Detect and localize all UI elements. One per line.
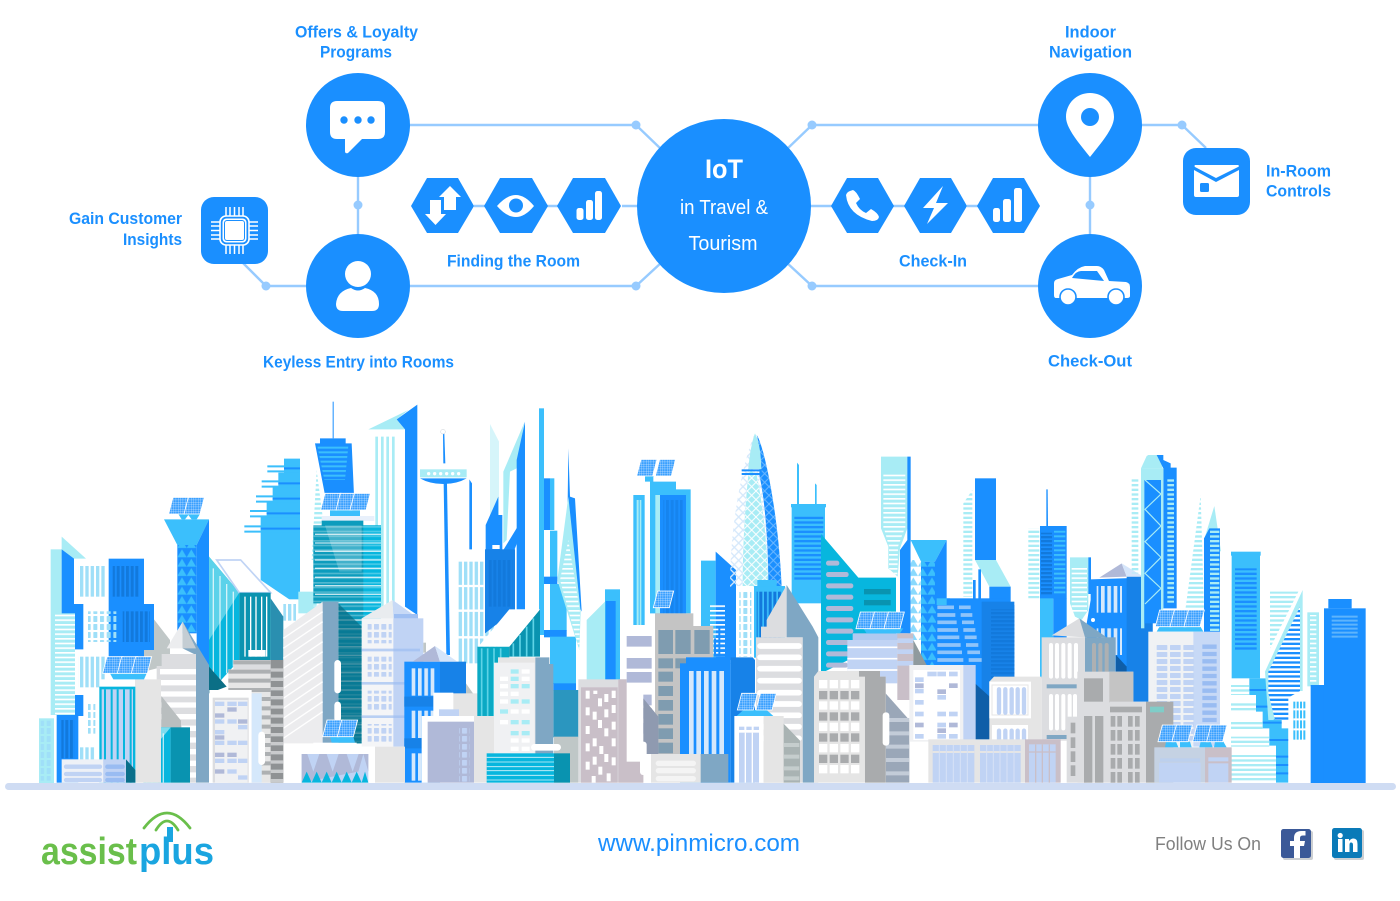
low front block [62,759,126,783]
twin spire tower [791,463,826,603]
stepped cyan lines block [1231,678,1288,783]
logo word plus: plus [139,831,214,873]
facebook icon [1281,829,1313,860]
cyan wedge tower [701,552,736,660]
label: indoor navigation: Indoor [1065,22,1116,42]
teal stepped building with pills [821,534,896,673]
node: check-out car icon [1038,234,1142,338]
gray roofed building [1042,618,1116,741]
logo word assist: assist [41,831,137,873]
triangle-patterned tower two [911,540,950,665]
skyline left section [39,402,498,783]
pale striped triangular spire [1185,495,1221,641]
pale blue striped building [458,562,498,663]
blue banded office tower [936,598,1014,740]
cyan tower with blue bands [1231,552,1261,678]
triangle-patterned tower [164,497,209,667]
gherkin lattice tower [730,433,782,587]
diagonal cyan-edged wedge [1265,590,1303,720]
follow us on label: Follow Us On [1155,833,1261,854]
teal banded tower with solar panels [313,493,381,743]
teal striped base block [487,753,570,783]
ground strip [5,783,1396,790]
low pill block [651,754,728,783]
white windowed gray annex [989,677,1042,742]
label: gain customer insights: Gain Customer [69,209,182,228]
label: offers and loyalty programs: Offers & Loyalty [295,22,419,42]
lavender window tower with solar panels [1148,610,1220,747]
small teal block [143,727,190,783]
blue slab with cyan chevron [963,478,1011,607]
rose gray building [578,679,643,783]
blue lower block [57,716,78,783]
zigzag braced tower [1132,455,1177,628]
cyan striped spire [312,470,323,560]
gray wedge building [283,602,341,743]
hexagon: signal bars [977,178,1040,233]
skyline middle section [474,408,950,783]
gray grid window building [814,671,909,783]
blue tower with solar panels [633,459,691,625]
hourglass tower [881,457,911,633]
blue tapered tower with antenna [315,402,354,495]
teal framed building with solar panels [99,657,161,783]
white and blue windowed pair [737,580,785,658]
label: in-room controls [1266,162,1331,200]
lavender striped gray tower [627,613,713,775]
white block with cyan windows [1288,691,1311,783]
hub title: IoT [705,154,743,184]
label: check-in: Check-In [899,252,967,270]
node: keyless entry person icon [306,234,410,338]
teal-sided building with white roof [209,557,283,693]
linkedin icon [1332,828,1364,860]
gray banded stack [228,650,283,783]
cyan and blue slab [587,589,620,680]
blue building with lavender roof [404,646,480,783]
gray spire tower with pills [756,585,818,783]
pentagon roof window tower [362,600,426,747]
label: keyless entry into rooms: Keyless Entry into Rooms [263,352,454,372]
right blue tower [1311,599,1366,783]
low block pair [928,739,1061,783]
label: indoor navigation [1049,22,1132,62]
tall white tower with blue wing [368,405,417,615]
slim blue slab [469,479,472,549]
central gray block with dark windows [1062,672,1173,783]
solar-topped low block [1154,725,1232,783]
low gray front block [474,716,578,783]
skyline right section [909,455,1366,783]
windowed lavender block [494,657,561,754]
stepped column tower [539,408,578,737]
website url: www.pinmicro.com [597,830,800,857]
white pagoda tower [157,622,209,783]
striped mauve tower with solar panels [847,612,927,700]
stepped cyan tower [244,459,300,607]
label: gain customer insights: Insights [123,230,182,249]
white front hall with triangle frieze [295,720,405,783]
hub subtitle line 1: in Travel & [680,197,769,219]
hexagon: phone [831,178,894,233]
label: check-out: Check-Out [1048,352,1132,370]
label: indoor navigation: Navigation [1049,42,1132,62]
dark blue angular tower [485,422,525,633]
small white building behind [279,592,317,623]
label: offers and loyalty programs [295,22,419,62]
window block building [209,690,265,783]
hexagon: signal bars [557,178,621,233]
cyan spike [490,424,499,533]
blue building with pale roof [1087,563,1153,702]
front white building with lavender wall [422,693,480,783]
white windowed lavender front tower [909,665,976,742]
hexagon: lightning bolt [904,178,967,233]
cyan hourglass small tower [1070,557,1091,620]
triangular striped spire [557,448,582,650]
hexagon: transfer arrows [411,178,474,233]
white-roofed teal block [477,609,540,717]
logo letter stem [167,827,173,842]
central hub: IoT in Travel & Tourism [637,119,811,293]
label: finding the room: Finding the Room [447,252,580,270]
icon tile: microchip [201,197,268,264]
blue-windowed white block with solar panels [734,693,800,783]
node: offers and loyalty chat icon [306,73,410,177]
label: in-room controls: In-Room [1266,162,1331,180]
hexagon: eye [484,178,548,233]
slim cyan strip tower [1307,612,1319,686]
label: in-room controls: Controls [1266,182,1331,200]
connector nodes [262,120,1186,290]
assistplus logo [41,813,214,873]
connector network [243,125,1206,286]
label: offers and loyalty programs: Programs [320,42,392,62]
observation tower [420,429,467,655]
blue windowed front tower [680,628,755,783]
icon tile: envelope [1183,148,1250,215]
logo wifi arcs [144,813,190,830]
gray building shadow [144,619,170,672]
twin-tone spire tower [1028,489,1067,678]
city skyline illustration [5,402,1396,790]
label: gain customer insights [69,209,182,249]
node: indoor navigation pin icon [1038,73,1142,177]
hub subtitle line 2: Tourism [688,233,758,255]
small cyan block [39,718,54,783]
cyan slab with white block stack [51,537,154,761]
